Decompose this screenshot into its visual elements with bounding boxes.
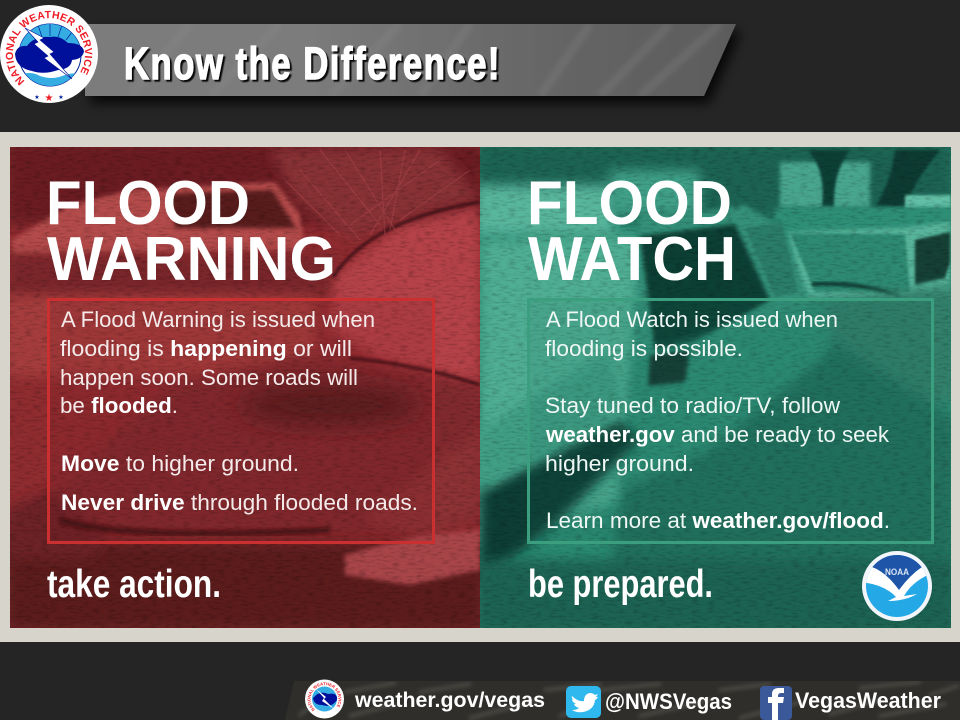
link: twitter handle: @NWSVegas: [605, 689, 732, 714]
heading: flood warning: FLOOD: [46, 169, 250, 238]
footer band: [286, 680, 960, 720]
box: watch description: Learn more at weather.gov/flood.: [546, 508, 890, 533]
logo: small NWS: NATIONAL WEATHER SERVICE: [308, 682, 342, 712]
box: warning description: [48, 300, 434, 542]
panel: flood warning: [5, 140, 485, 632]
logo: National Weather Service: ★: [34, 94, 40, 101]
box: warning description: A Flood Warning is issued when: [61, 307, 375, 332]
box: warning description: Move to higher ground.: [61, 451, 299, 476]
photo: flooded cars in red tint: [5, 140, 485, 632]
box: warning description: Never drive through flooded roads.: [61, 490, 418, 515]
icon: twitter: [566, 686, 601, 718]
box: watch description: flooding is possible.: [545, 336, 743, 361]
box: warning description: be flooded.: [60, 393, 178, 418]
link: facebook page: VegasWeather: [795, 688, 941, 713]
box: warning description: happen soon. Some roads will: [60, 365, 358, 390]
tagline: take action: take action.: [47, 563, 221, 606]
logo: NOAA: [860, 550, 934, 621]
box: watch description: higher ground.: [545, 451, 694, 476]
icon: facebook: [760, 686, 792, 720]
title text: Know the Difference!: [124, 38, 501, 89]
box: watch description: Stay tuned to radio/TV, follow: [545, 393, 840, 418]
link: website: weather.gov/vegas: [354, 689, 545, 712]
panel: flood warning: WARNING: [47, 225, 336, 294]
box: watch description: A Flood Watch is issued when: [546, 307, 838, 332]
panel: flood watch: [475, 140, 955, 640]
logo: National Weather Service: ★: [58, 94, 64, 101]
logo: National Weather Service: NATIONAL WEATHER SERVICE: [6, 10, 92, 86]
tagline: be prepared: be prepared.: [528, 563, 713, 606]
frame around flood graphic: [0, 132, 960, 642]
title banner: [85, 24, 736, 96]
box: warning description: flooding is happening or will: [60, 336, 352, 361]
panel: flood watch: WATCH: [528, 225, 736, 294]
box: watch description: [528, 300, 932, 542]
logo: National Weather Service: ★: [45, 93, 54, 104]
heading: flood watch: FLOOD: [527, 169, 732, 238]
photo: flooded cars in green tint: [475, 140, 955, 640]
box: watch description: weather.gov and be ready to seek: [545, 422, 890, 447]
logo: NOAA: NOAA: [885, 567, 909, 578]
